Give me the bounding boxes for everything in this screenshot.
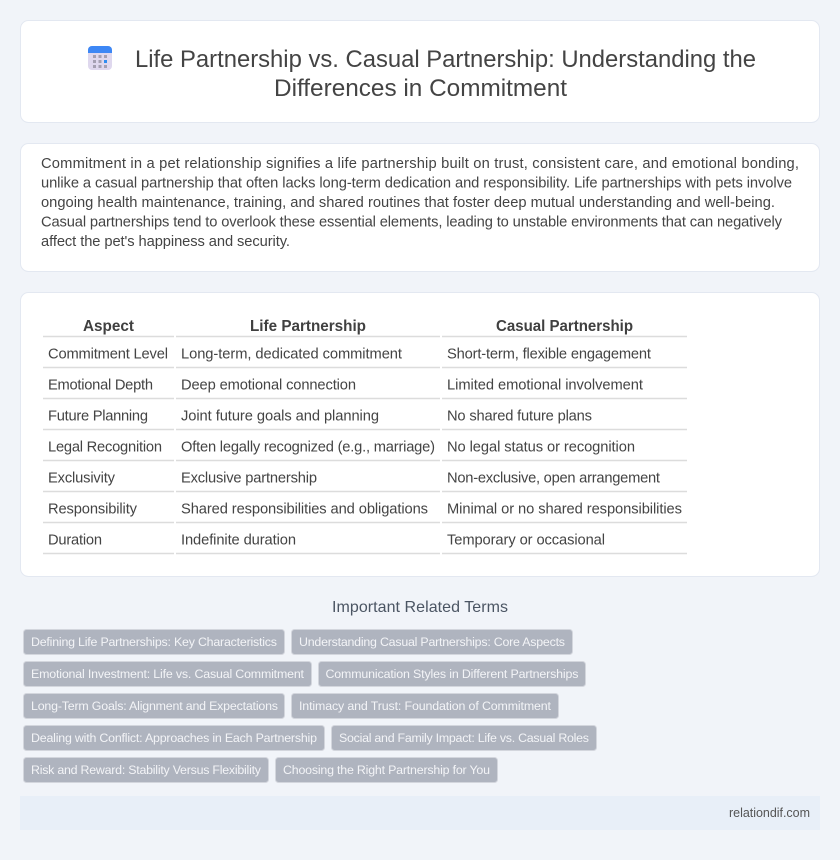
table row: commitment level: [48, 346, 651, 362]
table row: responsibility: Responsibility: [48, 502, 138, 518]
tag: Long-Term Goals: Alignment and Expectations: [31, 699, 278, 713]
table row: legal recognition: [48, 440, 635, 456]
table row: responsibility: Minimal or no shared responsibilities: [447, 502, 682, 518]
tag: Defining Life Partnerships: Key Characteristics: [31, 635, 277, 649]
tag list: related terms: [24, 630, 596, 782]
icon: calendar: [88, 46, 112, 70]
tag: [318, 662, 586, 686]
tag: Social and Family Impact: Life vs. Casual Roles: [339, 731, 589, 745]
table row: exclusivity: Non-exclusive, open arrangement: [447, 470, 660, 486]
table row: emotional depth: Emotional Depth: [48, 378, 153, 394]
table row: responsibility: Shared responsibilities and obligations: [181, 502, 428, 518]
tag: [24, 662, 312, 686]
table row: duration: Temporary or occasional: [447, 532, 605, 548]
table row: future planning: Joint future goals and planning: [181, 408, 379, 424]
panel: intro text: [20, 144, 820, 272]
table row: duration: [48, 532, 605, 548]
table header: [83, 318, 633, 335]
text block: intro paragraph: ongoing health maintenance, training, and shared routines that foster deep mutual understanding and well-being.: [41, 195, 775, 211]
table row: emotional depth: Deep emotional connection: [181, 378, 356, 394]
table row: legal recognition: Legal Recognition: [48, 440, 162, 456]
table row: duration: Indefinite duration: [181, 532, 296, 548]
text block: intro paragraph: unlike a casual partnership that often lacks long-term dedication and responsibility. Life partnerships with pets involve: [41, 176, 792, 192]
tag: [292, 694, 558, 718]
table row: commitment level: Long-term, dedicated commitment: [181, 346, 402, 362]
table row: future planning: [48, 408, 592, 424]
tag: Risk and Reward: Stability Versus Flexibility: [31, 763, 262, 777]
table header: Casual Partnership: [496, 318, 633, 335]
table row: future planning: No shared future plans: [447, 408, 592, 424]
table row: legal recognition: Often legally recognized (e.g., marriage): [181, 440, 435, 456]
table row: legal recognition: No legal status or recognition: [447, 440, 635, 456]
tag: Choosing the Right Partnership for You: [283, 763, 490, 777]
tag: [332, 726, 596, 750]
table row: future planning: Future Planning: [48, 408, 148, 424]
table row: commitment level: Commitment Level: [48, 346, 168, 362]
title: Life Partnership vs. Casual Partnership: Understanding the: [135, 46, 756, 73]
table header: Aspect: [83, 318, 135, 335]
tag: Intimacy and Trust: Foundation of Commitment: [299, 699, 552, 713]
table row: emotional depth: Limited emotional involvement: [447, 378, 643, 394]
tag: [24, 726, 324, 750]
tag: Dealing with Conflict: Approaches in Each Partnership: [31, 731, 317, 745]
text block: intro paragraph: affect the pet's happiness and security.: [41, 234, 290, 250]
table row: emotional depth: [48, 378, 643, 394]
table row: responsibility: [48, 502, 682, 518]
text block: intro paragraph: Casual partnerships tend to overlook these essential elements, leading to unstable environments that can negatively: [41, 214, 783, 230]
footer: [20, 796, 820, 830]
tag: [292, 630, 572, 654]
tag: Understanding Casual Partnerships: Core Aspects: [299, 635, 565, 649]
tag: [24, 694, 284, 718]
panel: title header: [20, 20, 820, 122]
table row: duration: Duration: [48, 532, 102, 548]
text block: intro paragraph: Commitment in a pet relationship signifies a life partnership built on trust, consistent care, and emotional bonding,: [41, 156, 799, 172]
panel: comparison table: [20, 292, 820, 576]
title: [135, 46, 756, 102]
tag: Communication Styles in Different Partnerships: [326, 667, 578, 681]
table row: exclusivity: [48, 470, 660, 486]
heading: important related terms: Important Related Terms: [332, 599, 508, 616]
tag: Emotional Investment: Life vs. Casual Commitment: [31, 667, 305, 681]
footer: relationdif.com: [729, 806, 810, 820]
tag: [24, 758, 268, 782]
tag: [276, 758, 498, 782]
table row: commitment level: Short-term, flexible engagement: [447, 346, 651, 362]
tag: [24, 630, 284, 654]
table row: exclusivity: Exclusivity: [48, 470, 116, 486]
table row: exclusivity: Exclusive partnership: [181, 470, 317, 486]
text block: intro paragraph: [41, 156, 799, 250]
table header: Life Partnership: [250, 318, 366, 335]
title: Differences in Commitment: [274, 75, 567, 102]
